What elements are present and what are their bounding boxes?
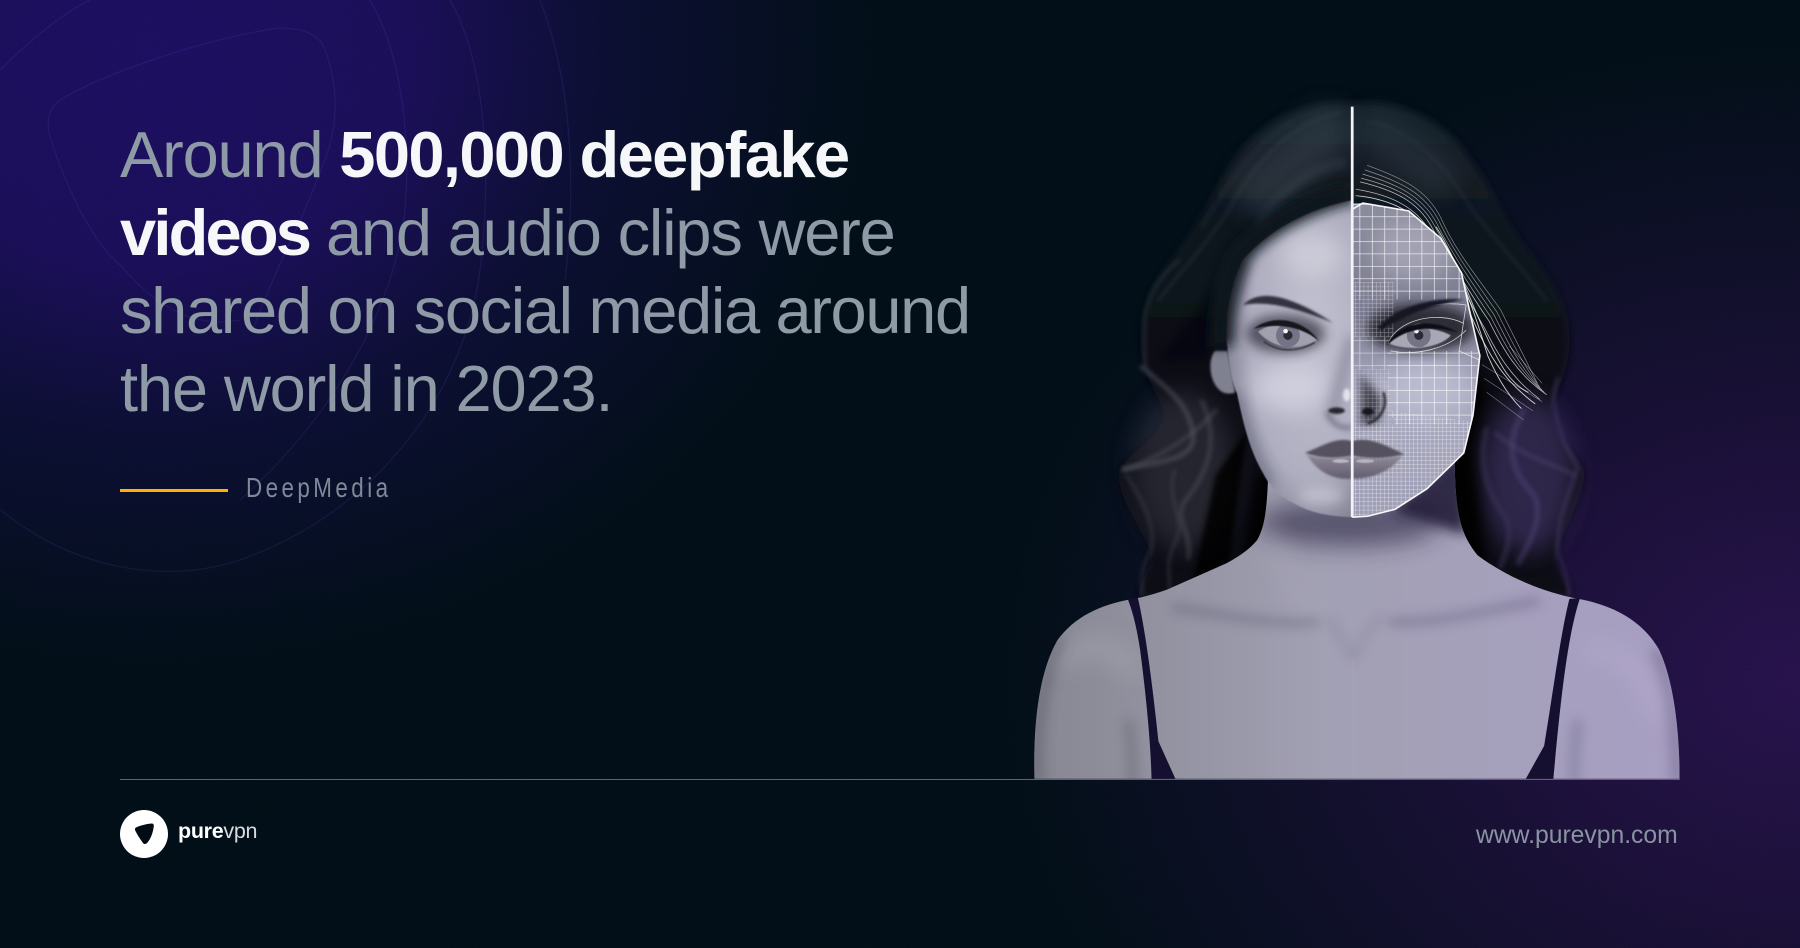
headline: videos and audio clips were (120, 196, 895, 269)
website url: www.purevpn.com (1476, 822, 1678, 849)
headline: Around 500,000 deepfake (120, 118, 848, 191)
face right: wireframe half (1352, 199, 1485, 521)
logo: PureVPN (120, 810, 257, 858)
left eye (1253, 320, 1319, 350)
face outline (1352, 203, 1480, 517)
headline: shared on social media around (120, 274, 970, 347)
left ear (1210, 351, 1235, 394)
hair wireframe lines (1356, 165, 1546, 420)
hair (1118, 103, 1584, 597)
icon: shield badge (120, 810, 168, 858)
logo: PureVPN: purevpn (178, 819, 257, 843)
source: accent line and DeepMedia (120, 472, 392, 503)
face left: photo half (1220, 197, 1354, 521)
left eyebrow (1243, 296, 1333, 323)
right eyebrow (1377, 299, 1465, 330)
central dividing line (1351, 107, 1354, 517)
right nose (1362, 392, 1385, 423)
right lips (1352, 440, 1404, 479)
hairline shadow over forehead (1220, 193, 1352, 346)
left lips (1305, 440, 1352, 479)
portrait: half-real half-wireframe face (1034, 99, 1680, 779)
source: accent line and DeepMedia: DeepMedia (246, 472, 392, 503)
left nose (1327, 407, 1352, 428)
right eye (1387, 323, 1458, 348)
footer rule (120, 779, 1680, 780)
headline: the world in 2023. (120, 352, 612, 425)
neck and shoulders (1034, 462, 1680, 779)
dress straps (1128, 598, 1580, 779)
headline (120, 118, 970, 425)
